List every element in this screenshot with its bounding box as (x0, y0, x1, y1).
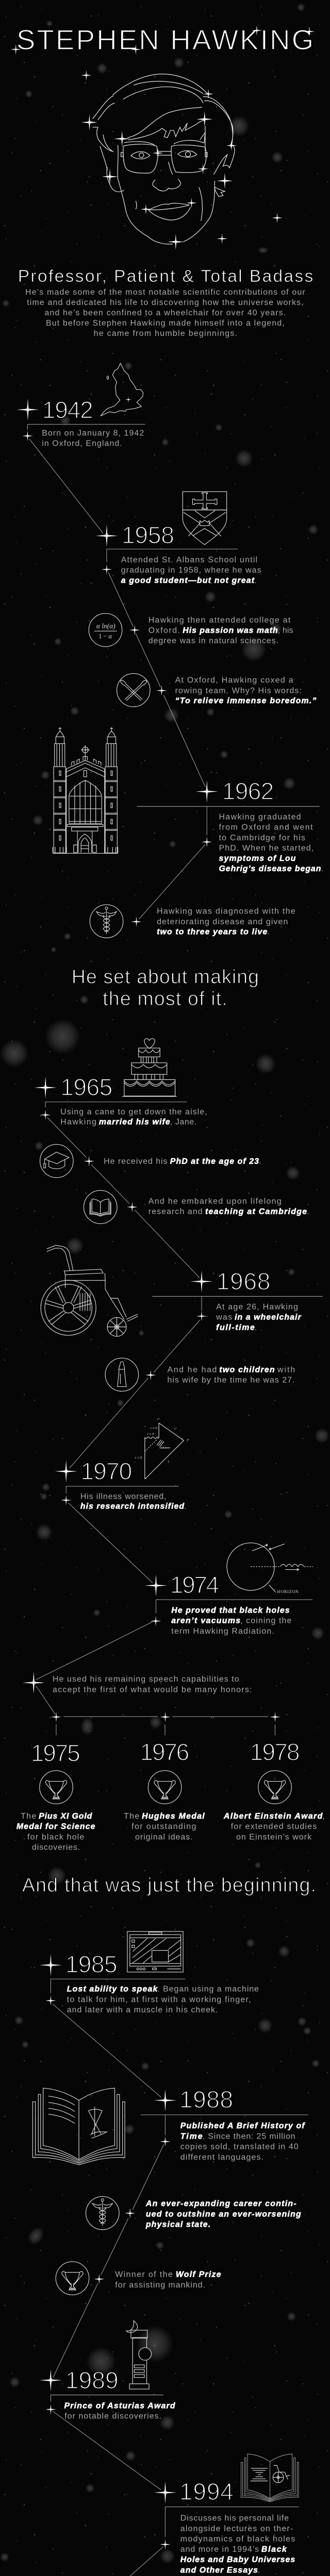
icon: trophy (258, 1771, 291, 1804)
panel: 1962: PhD. When he started, (219, 844, 314, 853)
panel: 1988: different languages. (180, 2153, 263, 2162)
panel: 1994: Holes and Baby Universes (180, 2555, 295, 2564)
intro paragraph (25, 288, 306, 338)
heading: He set about making the most of it: He set about making (72, 966, 259, 988)
panel: 1974: He proved that black holes (171, 1606, 290, 1615)
connector lines (53, 2411, 163, 2576)
panel: 1974: term Hawking Radiation. (171, 1627, 274, 1636)
panel: diagnosis: deteriorating disease and given (157, 918, 288, 926)
intro paragraph: But before Stephen Hawking made himself into a legend, (46, 319, 285, 328)
panel: 1994: modynamics of black holes (180, 2535, 295, 2544)
panel: 1970: His illness worsened, (80, 1492, 166, 1501)
panel: teaching: research and (148, 1208, 203, 1216)
icon: Penrose diagram: r = 0 (151, 1427, 157, 1430)
panel: 1975: Pius XI Gold (39, 1812, 92, 1821)
panel: two children (105, 1358, 295, 1391)
panel: 1988: 1988 (179, 2086, 233, 2113)
panel: two children: his wife by the time he was 27. (167, 1376, 294, 1385)
icon: wedding cake (122, 1039, 177, 1096)
panel: 1968: was (216, 1313, 232, 1322)
heading: And that was just the beginning: And that was just the beginning. (22, 1874, 316, 1895)
icon: baby bottle (105, 1358, 139, 1391)
icon: caduceus (90, 905, 123, 938)
panel: 1978: , (322, 1812, 325, 1821)
panel: 1965 (35, 1039, 207, 1126)
intro paragraph: He’s made some of the most notable scientific contributions of our (25, 288, 306, 297)
panel: 1988: Time (180, 2132, 203, 2141)
panel: honors intro: accept the first of what would be many honors: (53, 1685, 252, 1694)
panel: 1942: Born on January 8, 1942 (42, 429, 144, 437)
panel: Oxford math: , his (278, 626, 293, 635)
panel: 1962: from Oxford and went (219, 823, 313, 832)
connector lines (69, 1378, 153, 1649)
title sparkles (10, 25, 315, 55)
connector lines (53, 2004, 164, 2378)
panel: 1965: 1965 (60, 1074, 112, 1100)
icon: Penrose diagram: r = 0 (147, 1433, 154, 1436)
panel: 1962: Gehrig’s disease began (219, 865, 321, 873)
panel: 1968: At age 26, Hawking (216, 1303, 298, 1312)
panel: diagnosis: Hawking was diagnosed with the (157, 907, 295, 916)
icon: caduceus (86, 2196, 119, 2230)
panel: 1942: in Oxford, England. (42, 439, 122, 448)
panel: 1985 text: . Began using a machine (157, 1985, 259, 1994)
icon: Penrose diagram: r = 0 (135, 1456, 142, 1460)
panel: 1994: and Other Essays (180, 2566, 258, 2574)
panel: Oxford math (89, 614, 293, 647)
panel: PhD: . (259, 1157, 261, 1166)
panel: 1958: graduating in 1958, where he was (121, 566, 261, 574)
panel: 1962: . (321, 865, 323, 873)
icon: Penrose diagram: I⁺ (174, 1428, 177, 1431)
panel: two children: And he had (167, 1365, 217, 1374)
panel: 1988: copies sold, translated in 40 (180, 2142, 299, 2151)
panel: 1942 (16, 363, 145, 448)
connector lines (139, 695, 205, 919)
panel: rowing: At Oxford, Hawking coxed a (175, 676, 293, 685)
panel: 1988 (141, 2086, 308, 2162)
portrait sparkles (81, 70, 283, 250)
panel: ever-expanding career: An ever-expanding career contin- (145, 2199, 296, 2208)
icon: graduation cap (40, 1144, 73, 1178)
section: first honors 1975 to 1978 (16, 1649, 325, 1978)
panel: 1985 year and screen (40, 1931, 183, 1978)
panel: 1976: Hughes Medal (142, 1812, 205, 1821)
icon: book with wheelchair (241, 2454, 299, 2502)
panel: 1974: aren’t vacuums (171, 1617, 240, 1625)
title: STEPHEN HAWKING (16, 24, 314, 56)
panel: 1965: Using a cane to get down the aisle, (60, 1108, 207, 1116)
panel: 1978 (223, 1738, 325, 1842)
panel: 1994: Black (261, 2545, 287, 2554)
panel: teaching: And he embarked upon lifelong (148, 1197, 282, 1206)
panel: 1975: Medal for Science (16, 1822, 95, 1831)
panel: PhD: PhD at the age of 23 (170, 1157, 259, 1166)
icon: trophy (40, 1771, 73, 1804)
panel: 1970: his research intensified (80, 1502, 184, 1511)
panel: 1975: for black hole (27, 1833, 84, 1842)
section: 1965 to 1968 (35, 1039, 323, 1372)
panel: 1968: in a wheelchair (235, 1313, 301, 1322)
panel: 1976: The (124, 1812, 139, 1821)
panel: 1958: . (254, 576, 256, 585)
icon: trophy (56, 2262, 89, 2295)
panel: Oxford math: degree was in natural sciences. (148, 637, 278, 646)
icon: speech computer (127, 1931, 183, 1972)
section: Oxford and Cambridge (53, 673, 323, 1009)
panel: 1985 year and screen: 1985 (65, 1951, 118, 1978)
panel: 1989: Prince of Asturias Award (64, 2401, 175, 2410)
panel: 1975: The (21, 1812, 36, 1821)
icon: map of England (101, 363, 143, 416)
panel: 1965: married his wife (99, 1117, 170, 1126)
panel: Wolf Prize: Winner of the (115, 2270, 173, 2279)
icon: crossed oars (117, 673, 150, 707)
panel: 1962 (137, 777, 323, 873)
icon: book (84, 1191, 117, 1224)
panel: 1989: 1989 (65, 2367, 119, 2394)
panel: 1989: for notable discoveries. (64, 2412, 161, 2421)
section: 1970 to 1974 (55, 1358, 313, 1649)
panel: 1974: 1974 (170, 1571, 219, 1598)
connector lines (36, 1649, 275, 1735)
panel: 1962: symptoms of Lou (219, 854, 296, 863)
panel: 1975: 1975 (31, 1739, 80, 1766)
panel: 1976: for outstanding (131, 1822, 196, 1831)
panel: Wolf Prize: for assisting mankind. (115, 2281, 205, 2290)
panel: 1962: to Cambridge for his (219, 834, 305, 842)
panel: honors intro (23, 1671, 252, 1694)
panel: Oxford math: Oxford. (148, 626, 180, 635)
panel: teaching (84, 1191, 309, 1224)
panel: ever-expanding career: physical state. (145, 2220, 210, 2229)
panel: 1962: 1962 (222, 777, 274, 804)
panel: 1978: on Einstein’s work (236, 1833, 311, 1842)
panel: 1942: 1942 (42, 396, 93, 423)
panel: ever-expanding career: ued to outshine an ever-worsening (146, 2210, 301, 2218)
panel: diagnosis: . (267, 927, 270, 936)
panel: PhD (40, 1144, 261, 1178)
panel: honors intro: He used his remaining speech capabilities to (53, 1675, 239, 1684)
icon: Penrose diagram (135, 1418, 189, 1479)
intro paragraph: time and dedicated his life to discovering how the universe works, (27, 298, 304, 307)
subtitle: Professor, Patient & Total Badass (18, 267, 313, 286)
panel: 1974: , coining the (240, 1617, 291, 1625)
panel: 1978: 1978 (250, 1738, 300, 1765)
icon: open book with hourglass (32, 2088, 125, 2165)
icon: black hole horizon diagram (227, 1543, 313, 1594)
icon: Cambridge chapel (53, 727, 118, 853)
panel: 1976: original ideas. (135, 1833, 192, 1842)
icon: black hole horizon diagram: HORIZON (277, 1589, 299, 1594)
panel: two children: two children (219, 1365, 275, 1374)
icon: equation in circle: α ln(α) (96, 622, 116, 630)
icon: St. Albans shield (183, 492, 227, 545)
panel: 1958: 1958 (122, 521, 174, 548)
panel: diagnosis: two to three years to live (157, 927, 268, 936)
panel: 1958: Attended St. Albans School until (121, 555, 257, 564)
section: title and introduction (10, 24, 315, 338)
panel: 1985 text: to talk for him, at first with a working finger, (67, 1995, 251, 2004)
panel: diagnosis (90, 905, 295, 938)
icon: trophy (148, 1771, 182, 1804)
panel: 1976: 1976 (140, 1738, 189, 1765)
panel: 1994 (154, 2454, 299, 2574)
panel: rowing: rowing team. Why? His words: (175, 686, 302, 695)
section: 1985 to 1989 (32, 1979, 308, 2378)
panel: teaching: . (307, 1208, 309, 1216)
portrait: constellation line drawing of Hawking (93, 74, 235, 244)
icon: equation in circle (89, 614, 122, 647)
panel: 1970: . (184, 1502, 187, 1511)
icon: Penrose diagram: I⁻ (168, 1461, 171, 1464)
panel: 1958: a good student—but not great (121, 576, 255, 585)
icon: Asturias award tower (126, 2320, 151, 2389)
panel: Wolf Prize (56, 2262, 221, 2295)
panel: 1989 (40, 2320, 175, 2421)
intro paragraph: he came from humble beginnings. (94, 329, 237, 338)
icon: Penrose diagram: i⁺ (157, 1418, 160, 1421)
connector lines (47, 1117, 200, 1372)
section: early years 1942 to 1958 (16, 363, 293, 687)
panel: ever-expanding career (86, 2196, 301, 2230)
panel: 1968: full-time (216, 1324, 255, 1332)
heading: He set about making the most of it (72, 966, 259, 1009)
panel: 1970: 1970 (80, 1458, 132, 1484)
connector lines (29, 439, 160, 687)
panel: 1978: for extended studies (231, 1822, 317, 1831)
intro paragraph: and he’s been confined to a wheelchair for over 40 years. (45, 309, 286, 317)
timeline sparkles (51, 1711, 280, 1722)
icon: wheelchair (41, 1245, 138, 1336)
panel: 1994: Discusses his personal life (180, 2514, 289, 2523)
icon: equation in circle: 1 − α (98, 633, 112, 640)
panel: 1988: Published A Brief History of (180, 2122, 305, 2130)
panel: Wolf Prize: Wolf Prize (176, 2270, 221, 2279)
panel: 1985 text (45, 1979, 259, 2014)
icon: Penrose diagram: i⁰ (187, 1438, 189, 1443)
panel: 1976 (124, 1738, 205, 1842)
panel: 1985 text: and later with a muscle in his cheek. (67, 2006, 218, 2014)
panel: 1994: 1994 (179, 2478, 234, 2505)
panel: 1994: alongside lectures on ther- (180, 2524, 293, 2533)
panel: 1968: . (255, 1324, 257, 1332)
panel: rowing: “To relieve immense boredom.” (175, 697, 317, 705)
panel: 1962: Hawking graduated (219, 813, 301, 822)
panel: 1975: discoveries. (32, 1843, 80, 1852)
panel: rowing (117, 673, 317, 707)
panel: 1974 (145, 1543, 313, 1636)
panel: 1965: Hawking (60, 1117, 96, 1126)
panel: 1975 (16, 1739, 95, 1852)
panel: 1958 (95, 492, 261, 585)
panel: two children: with (277, 1365, 295, 1374)
panel: 1968: 1968 (217, 1268, 270, 1295)
panel: Oxford math: Hawking then attended college at (148, 616, 291, 625)
panel: 1994: and more in 1994’s (180, 2545, 259, 2554)
panel: 1985 text: Lost ability to speak (67, 1985, 158, 1994)
heading: He set about making the most of it: the most of it. (103, 988, 227, 1009)
panel: Oxford math: His passion was math (183, 626, 278, 635)
panel: 1968 (153, 1268, 323, 1332)
panel: 1994: . (258, 2566, 260, 2574)
panel: 1978: Albert Einstein Award (223, 1812, 323, 1821)
panel: 1970 (55, 1418, 189, 1511)
panel: PhD: He received his (104, 1157, 168, 1166)
icon: Penrose diagram: radiation (159, 1446, 170, 1449)
section: 1989 to 2006 (40, 2320, 299, 2576)
panel: 1965: , Jane. (170, 1117, 196, 1126)
panel: 1988: . Since then: 25 million (203, 2132, 295, 2141)
panel: teaching: teaching at Cambridge (205, 1208, 307, 1216)
